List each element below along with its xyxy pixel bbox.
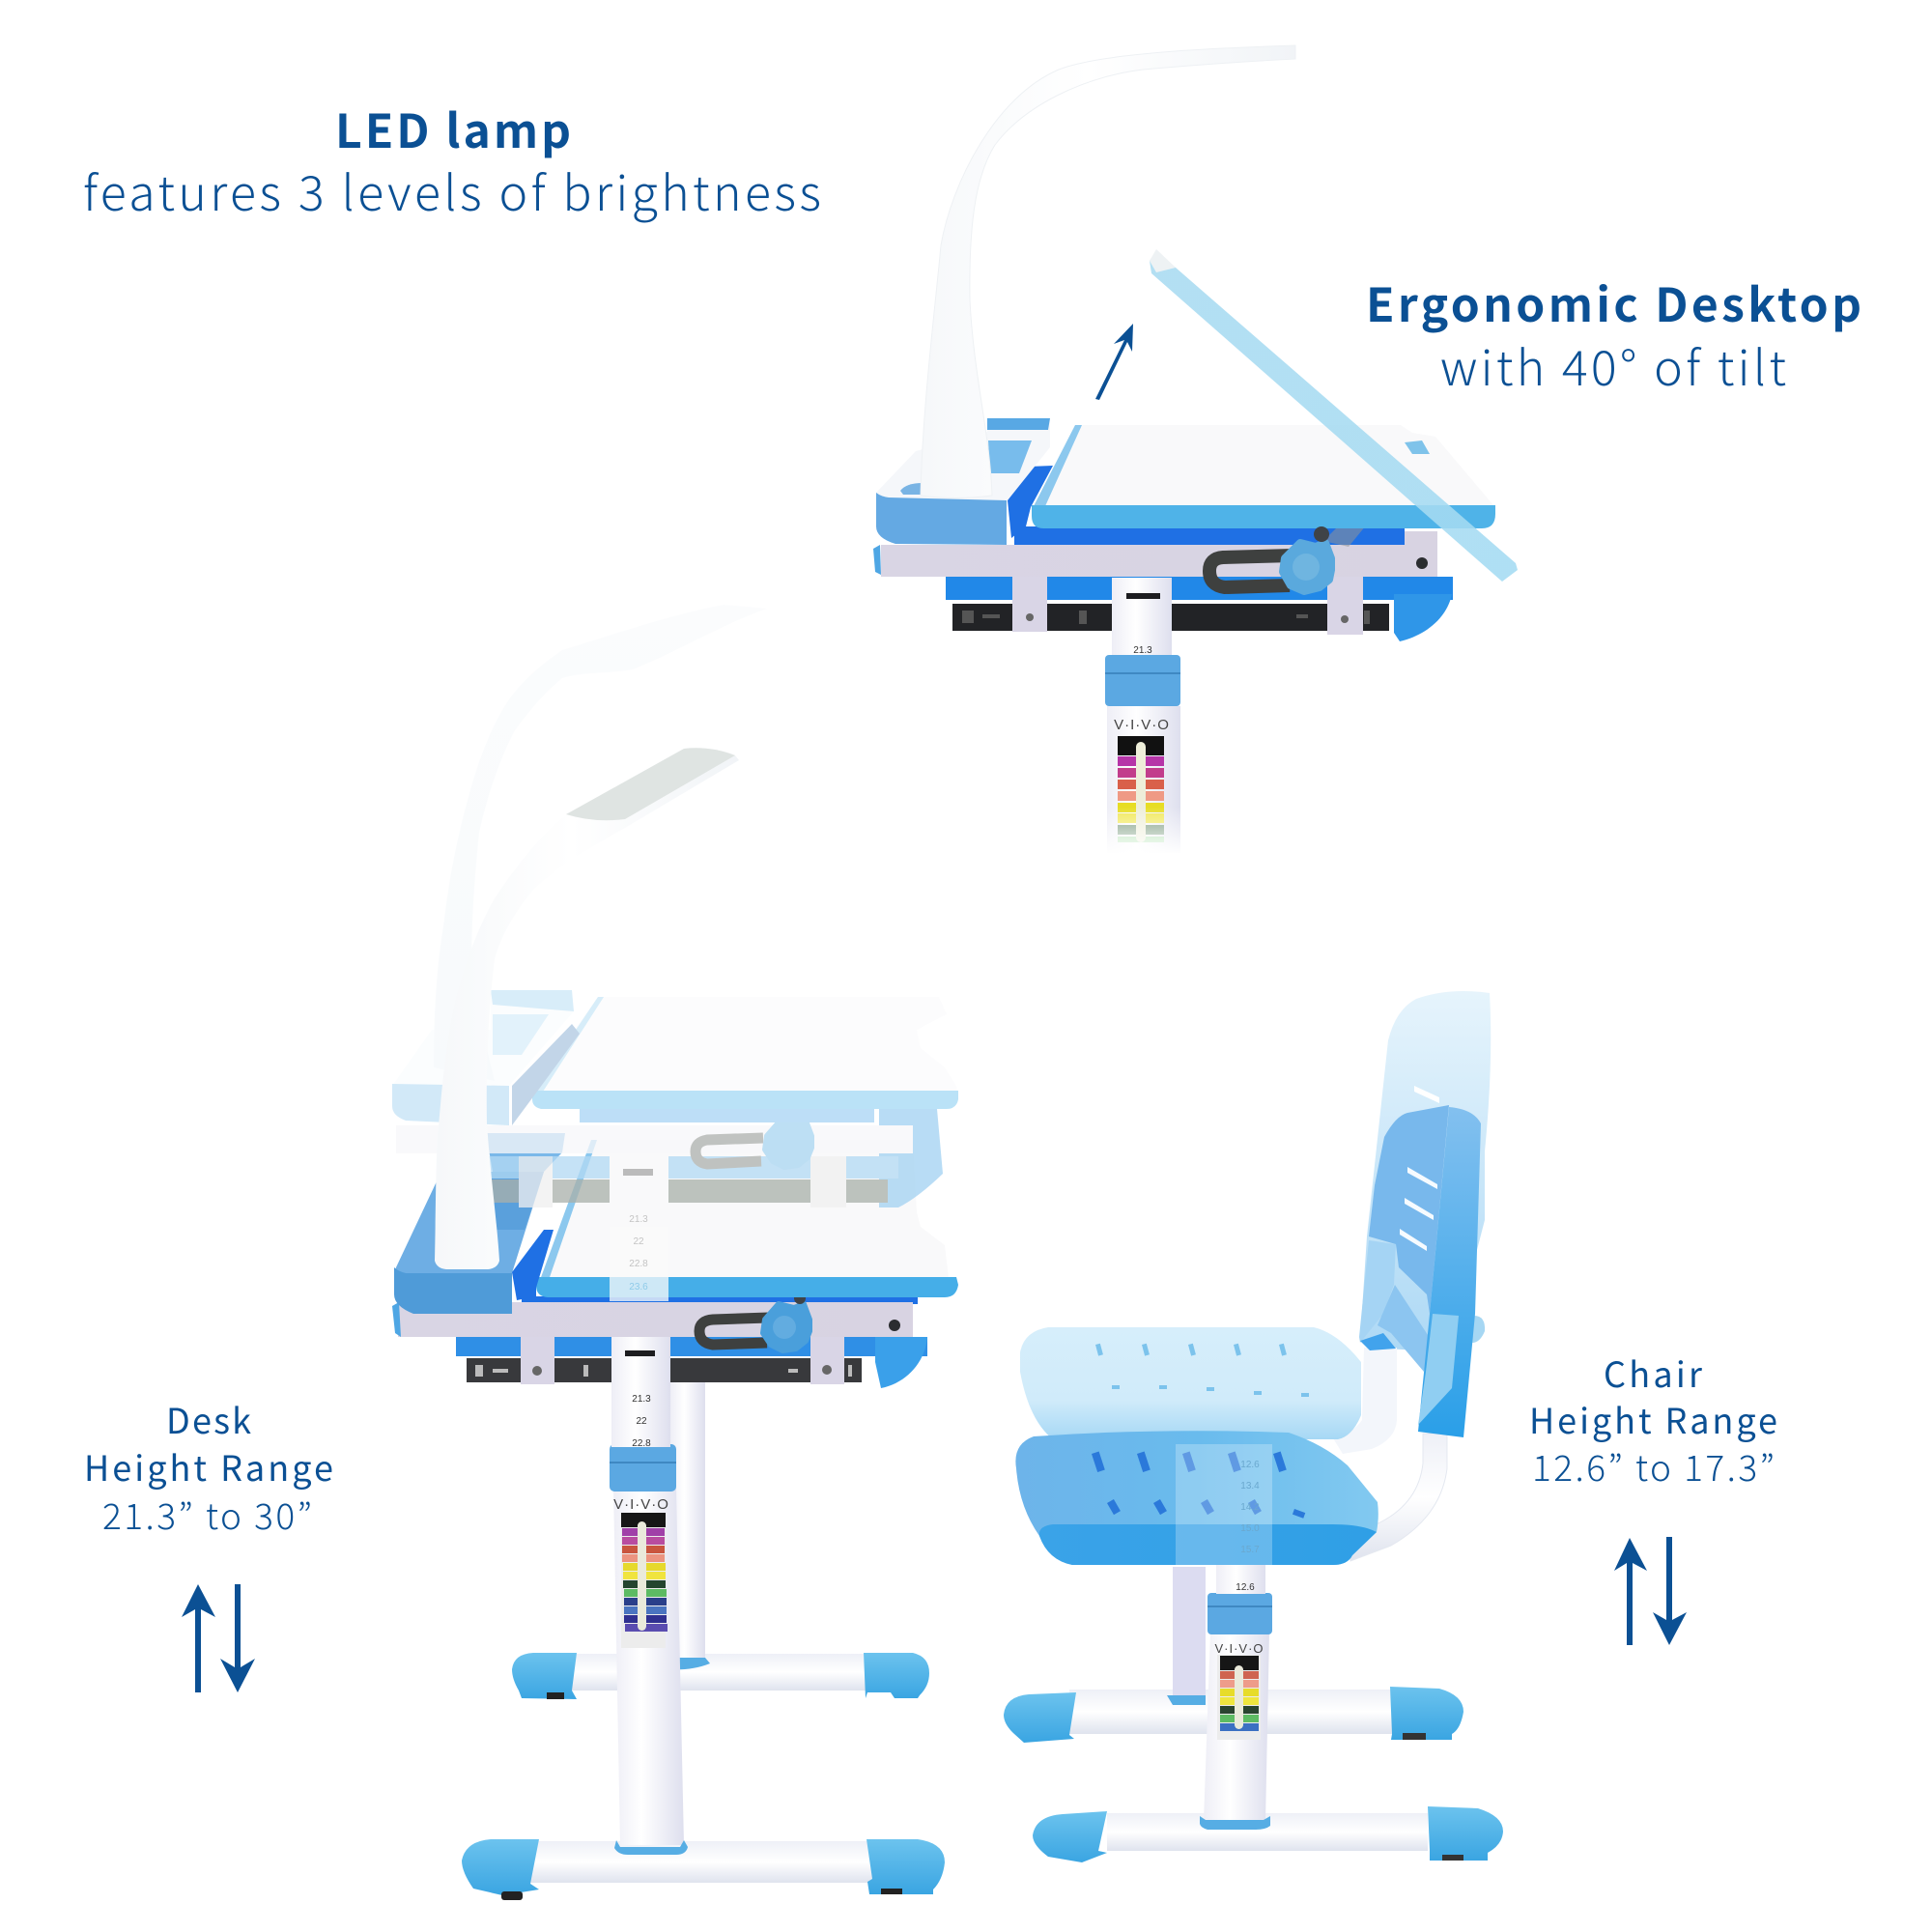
holder lip xyxy=(486,1133,565,1172)
slide slots xyxy=(962,611,1370,624)
rear right cap xyxy=(864,1653,929,1698)
fade at column bottom xyxy=(1101,807,1188,855)
rear right cap xyxy=(1390,1687,1463,1740)
ghost drawer end xyxy=(879,1109,943,1208)
text: chair height range: Height Range xyxy=(1529,1394,1777,1444)
height post xyxy=(1112,578,1172,657)
backrest bottom tip xyxy=(1360,1333,1396,1350)
backrest side band xyxy=(1418,1107,1481,1437)
front left cap xyxy=(1033,1811,1107,1862)
ghost holder lip xyxy=(491,990,574,1011)
ghost post values xyxy=(629,1214,648,1293)
front crossbar xyxy=(1107,1813,1428,1851)
tray front xyxy=(876,493,1007,545)
arrow: tilt direction xyxy=(1095,324,1133,400)
rear left cap xyxy=(512,1653,577,1699)
post value: 21.3 xyxy=(1133,645,1152,656)
holder lip xyxy=(987,418,1050,430)
rear left cap xyxy=(1004,1692,1076,1743)
post values: 21.3 xyxy=(632,1394,651,1405)
seat holes xyxy=(1092,1452,1305,1519)
rear crossbar xyxy=(572,1654,866,1690)
heading: LED lamp xyxy=(83,94,821,225)
lamp: lower position xyxy=(435,748,739,1269)
ghost table top xyxy=(532,997,958,1096)
tray dark strip xyxy=(512,1230,554,1300)
brackets xyxy=(1012,577,1363,635)
tray top surface xyxy=(394,1172,544,1273)
underside xyxy=(1014,526,1405,545)
ghost scale values xyxy=(1240,1460,1260,1555)
ghost scale values: 14.2 xyxy=(1240,1502,1260,1513)
backrest knob xyxy=(1472,1316,1485,1343)
ghost post values: 23.6 xyxy=(629,1282,648,1293)
ghost tray surface xyxy=(392,990,574,1086)
chair xyxy=(1004,991,1503,1862)
drawer end xyxy=(1394,594,1452,641)
post values: 22 xyxy=(636,1416,647,1427)
heading: Ergonomic Desktop: Ergonomic Desktop xyxy=(1366,268,1861,335)
seat front lip xyxy=(1039,1524,1377,1565)
ghost scale values: 15.7 xyxy=(1240,1545,1260,1555)
adjustment slot xyxy=(699,1318,769,1345)
heading: LED lamp: features 3 levels of brightness xyxy=(83,156,821,225)
backrest slots xyxy=(1400,1167,1437,1251)
rear post xyxy=(1173,1567,1206,1702)
frame xyxy=(881,531,1437,577)
pocket xyxy=(988,440,1032,473)
desk: lower position xyxy=(392,1133,958,1900)
rear leg xyxy=(670,1382,705,1665)
text: desk height range: Height Range xyxy=(84,1441,333,1492)
ghost slide xyxy=(464,1179,888,1203)
tube xyxy=(1345,1434,1447,1561)
pocket xyxy=(491,1172,544,1230)
ghost seat holes xyxy=(1095,1344,1309,1397)
ghost post values: 21.3 xyxy=(629,1214,648,1225)
ghost seat xyxy=(1020,1327,1361,1439)
post values xyxy=(632,1394,651,1449)
front right cap xyxy=(1428,1806,1503,1861)
text: chair height range: 12.6” to 17.3” xyxy=(1532,1439,1775,1492)
underside xyxy=(522,1296,918,1304)
drawer band xyxy=(456,1337,927,1356)
backrest lower left xyxy=(1359,1240,1396,1343)
column collar xyxy=(1105,655,1180,706)
heading: LED lamp: LED lamp xyxy=(335,94,571,161)
front left cap xyxy=(462,1839,539,1895)
tilt arm xyxy=(1323,471,1383,547)
drawer band xyxy=(946,577,1453,600)
lower column xyxy=(1107,706,1180,853)
ghost post values: 22.8 xyxy=(629,1259,648,1269)
lamp xyxy=(921,45,1295,498)
post values: 22.8 xyxy=(632,1438,651,1449)
collar xyxy=(1208,1593,1272,1634)
arrows: desk up and down xyxy=(182,1584,255,1692)
ghost frame xyxy=(396,1125,913,1153)
drawer end xyxy=(875,1337,927,1388)
arrows: chair up and down xyxy=(1614,1537,1687,1645)
knob xyxy=(763,1304,810,1350)
ghost scale values: 13.4 xyxy=(1240,1481,1260,1492)
drawer slide xyxy=(952,604,1389,631)
brand text: V·I·V·O xyxy=(1114,717,1170,733)
height chart xyxy=(621,1513,668,1648)
ghost tray front xyxy=(392,1084,509,1125)
tray front xyxy=(394,1267,512,1314)
ghost post xyxy=(610,1151,668,1301)
lamp head xyxy=(566,748,735,820)
brand text: V·I·V·O xyxy=(1214,1641,1264,1656)
knob xyxy=(1283,543,1331,591)
ghost post over seat xyxy=(1176,1444,1272,1565)
backrest inner face xyxy=(1369,1105,1449,1314)
column xyxy=(1204,1633,1269,1822)
drawer slide xyxy=(467,1358,862,1382)
ghost knob xyxy=(765,1121,811,1167)
table top xyxy=(1032,425,1495,510)
text: chair height range xyxy=(1529,1348,1777,1492)
rear crossbar xyxy=(1069,1690,1392,1734)
desk: raised position ghost xyxy=(392,990,958,1301)
frame xyxy=(398,1302,913,1337)
brackets xyxy=(521,1337,844,1384)
text: desk height range: 21.3” to 30” xyxy=(102,1488,312,1540)
post value: 12.6 xyxy=(1236,1582,1255,1593)
lamp: raised ghost xyxy=(434,605,767,1081)
backrest strut xyxy=(1378,1285,1430,1372)
front crossbar xyxy=(530,1841,872,1883)
adjustment slot xyxy=(1209,555,1293,587)
upper post xyxy=(1216,1565,1265,1594)
text: chair height range: Chair xyxy=(1604,1348,1703,1398)
seat xyxy=(1015,1431,1378,1565)
front column xyxy=(613,1488,684,1845)
ghost scale values: 12.6 xyxy=(1240,1460,1260,1470)
height chart xyxy=(1118,736,1164,842)
desk: tilted position, top xyxy=(873,45,1518,855)
height post xyxy=(611,1333,670,1447)
ghost pocket xyxy=(493,1014,549,1055)
cup hole xyxy=(900,483,923,495)
ghost strip xyxy=(512,1024,580,1125)
table top xyxy=(546,1140,949,1278)
height chart xyxy=(1217,1655,1261,1740)
tray top surface xyxy=(876,418,1050,504)
ghost backrest xyxy=(1360,991,1491,1352)
ghost drawer band xyxy=(473,1156,898,1179)
ghost brackets xyxy=(519,1156,846,1208)
brand text: V·I·V·O xyxy=(613,1496,669,1513)
slide slots xyxy=(475,1365,852,1377)
ghost scale values: 15.0 xyxy=(1240,1523,1260,1534)
heading: Ergonomic Desktop xyxy=(1366,268,1861,400)
ghost post values: 22 xyxy=(633,1236,644,1247)
tilted board xyxy=(1150,251,1518,582)
text: desk height range: Desk xyxy=(166,1394,251,1444)
ghost backrest slots xyxy=(1410,1086,1441,1134)
backrest light overlay xyxy=(1418,1314,1459,1425)
collar xyxy=(610,1444,676,1492)
ghost slot xyxy=(696,1138,763,1164)
text: desk height range xyxy=(84,1394,333,1540)
heading: Ergonomic Desktop: with 40° of tilt xyxy=(1440,330,1786,400)
front right cap xyxy=(867,1839,945,1894)
tray dark strip xyxy=(1008,466,1053,538)
ghost seat tube xyxy=(1333,1348,1397,1454)
